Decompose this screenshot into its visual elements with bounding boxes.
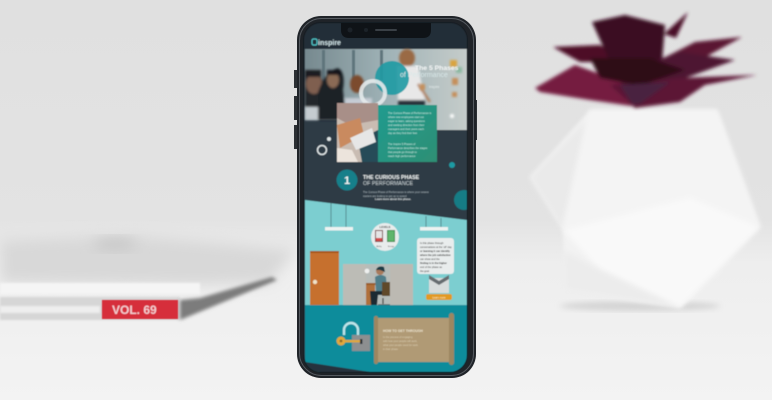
hero title: of Performance	[400, 72, 448, 79]
succulent plant	[535, 12, 757, 108]
scroll panel: what your people need for work	[383, 344, 419, 347]
plant pot	[530, 110, 760, 311]
phone screen	[304, 23, 474, 372]
hero title: The 5 Phases	[415, 65, 459, 72]
green text box: Performance describes the stages	[388, 146, 428, 150]
logo icon	[312, 39, 317, 45]
hero title: Inspire	[429, 85, 440, 89]
phase heading	[363, 175, 420, 187]
scroll panel	[374, 313, 454, 365]
green text box: that people go through to	[388, 150, 417, 154]
speech bubble: In this phase through	[420, 242, 444, 245]
scroll panel: HOW TO GET THROUGH	[383, 329, 423, 333]
scroll panel: In the process of engaging	[383, 336, 413, 339]
teal dot	[454, 190, 468, 210]
door	[310, 251, 339, 305]
logo text: inspire	[318, 40, 341, 47]
phase number badge: 1	[344, 175, 350, 187]
people	[305, 49, 430, 120]
levels circle: Ability	[376, 245, 382, 248]
envelope icon	[429, 275, 449, 293]
red label	[102, 300, 178, 319]
phase number badge	[336, 170, 358, 190]
speech bubble: finding is in the higher	[420, 262, 447, 265]
phase intro text: starters are looking to get up to speed	[363, 194, 407, 198]
green text box: reach high performance	[388, 154, 416, 158]
red label: VOL. 69	[112, 303, 157, 317]
scroll panel: in their phase	[383, 348, 399, 351]
phase heading: THE CURIOUS PHASE	[363, 175, 420, 181]
speech bubble: or learning it can identify	[420, 250, 450, 253]
lower teal section	[305, 305, 467, 372]
phone body	[294, 16, 477, 378]
speech bubble: can show and the	[420, 258, 440, 261]
scroll panel: with how your people will work,	[383, 340, 418, 343]
header bar	[304, 23, 467, 49]
orange button	[426, 294, 452, 300]
levels circle: LEVELS	[380, 225, 391, 229]
levels circle: Energy	[388, 246, 394, 248]
office scene wall	[305, 200, 467, 306]
green text box: eager to learn, asking questions	[388, 119, 425, 123]
magazine stack	[0, 235, 295, 320]
ceiling lamps	[325, 203, 448, 230]
green text box: managers and their peers each	[388, 127, 424, 131]
green text box: and seeking direction from their	[388, 123, 424, 127]
levels circle	[371, 223, 399, 251]
padlock and key	[336, 323, 370, 351]
speech bubble: where the job satisfaction	[420, 254, 451, 257]
green text box: The Curious Phase of Performance is	[388, 111, 432, 115]
cubicle and worker	[343, 264, 413, 305]
sticky notes	[420, 60, 462, 118]
speech bubble: conversations at the ‘off’ day	[420, 246, 452, 249]
desk photo	[337, 103, 378, 162]
phone notch	[341, 23, 431, 38]
hero title	[400, 65, 459, 89]
decorative circles	[318, 137, 455, 168]
teal circle	[375, 61, 409, 95]
speech bubble: end of the phase as	[420, 266, 443, 269]
green text box	[378, 105, 437, 162]
phase intro text: Learn more about this phase.	[375, 197, 411, 201]
infographic hero photo	[305, 49, 467, 130]
green text box: day as they find their feet	[388, 131, 417, 135]
phase intro text	[363, 190, 429, 201]
speech bubble: the goal.	[420, 270, 430, 273]
dark footer wedge	[305, 362, 370, 372]
green text box: where new employees start out	[388, 115, 424, 119]
speech bubble	[417, 238, 454, 274]
phase heading: OF PERFORMANCE	[363, 181, 413, 187]
phase intro text: The Curious Phase of Performance is where your newest	[363, 190, 429, 194]
white ring	[361, 81, 385, 105]
green text box: The Inspire 5 Phases of	[388, 142, 416, 146]
orange button: Learn more	[432, 296, 446, 300]
